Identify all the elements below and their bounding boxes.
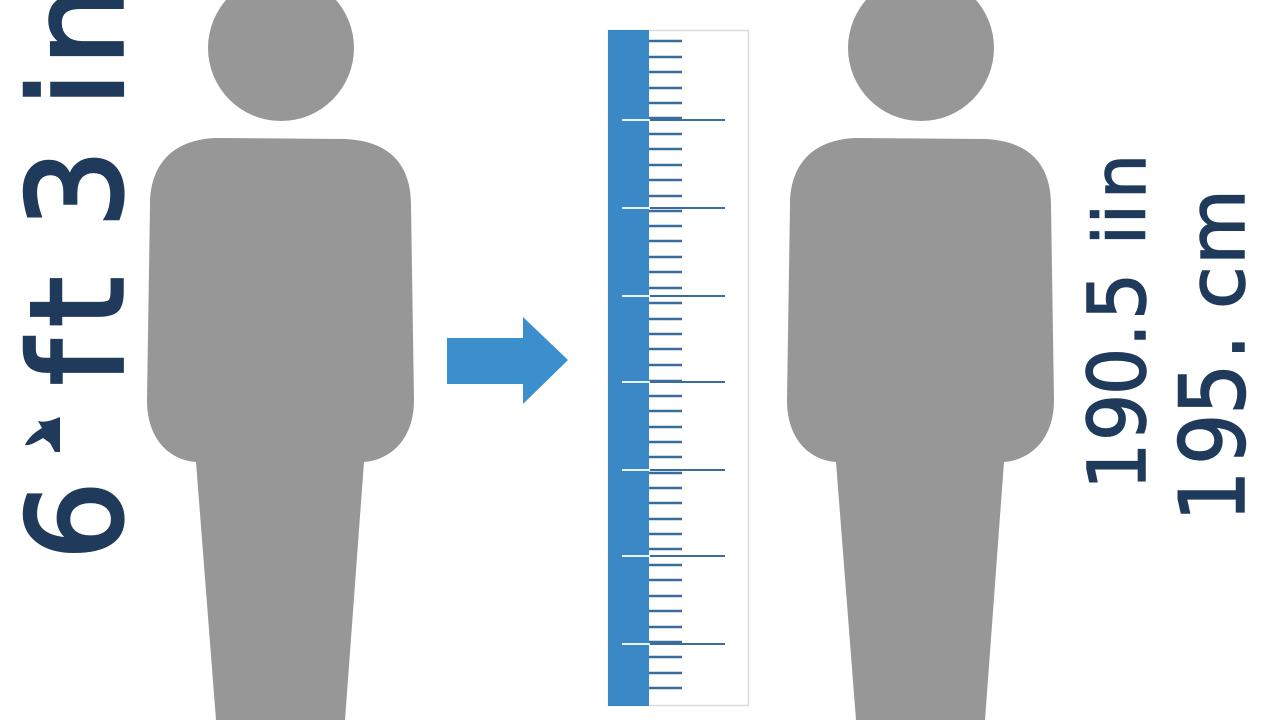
major ticks <box>649 120 725 644</box>
left person silhouette <box>147 0 414 720</box>
right height label: 195. cm <box>1162 189 1266 522</box>
apostrophe mark <box>25 417 60 452</box>
left height label: 6 ft 3 in: i <box>4 71 153 107</box>
right person silhouette <box>787 0 1054 720</box>
right height label: 195. cm: . <box>1162 334 1266 360</box>
right height label: 195. cm: c <box>1173 266 1263 309</box>
major tick highlights on blue band <box>622 120 650 644</box>
ruler <box>608 30 748 706</box>
left height label: 6 ft 3 in: 3 <box>0 149 152 228</box>
left height label: 6 ft 3 in: 6 <box>0 481 152 560</box>
left height label: 6 ft 3 in <box>0 0 153 560</box>
left height label: 6 ft 3 in: t <box>4 277 153 327</box>
right height label: 195. cm: 9 <box>1162 413 1266 465</box>
left height label: 6 ft 3 in: f <box>4 337 153 385</box>
right height label: 190.5 in: 1 <box>1073 443 1165 490</box>
right height label: 190.5 in: 0 <box>1073 348 1165 395</box>
right height label: 190.5 in: i <box>1079 204 1162 224</box>
arrow pointing to ruler <box>447 317 568 404</box>
right height label: 190.5 in: . <box>1073 323 1165 347</box>
right height label: 195. cm: 5 <box>1162 363 1266 415</box>
minor ticks <box>649 41 682 688</box>
right height label: 190.5 in: 5 <box>1073 273 1165 320</box>
right height label: 190.5 in: 9 <box>1073 394 1165 441</box>
right height label: 190.5 in: n <box>1079 154 1162 199</box>
right height label: 195. cm: m <box>1173 189 1263 265</box>
right height label: 190.5 in: i <box>1079 225 1162 245</box>
right height label: 195. cm: 1 <box>1162 470 1266 522</box>
right height label: 190.5 in <box>1073 154 1165 490</box>
